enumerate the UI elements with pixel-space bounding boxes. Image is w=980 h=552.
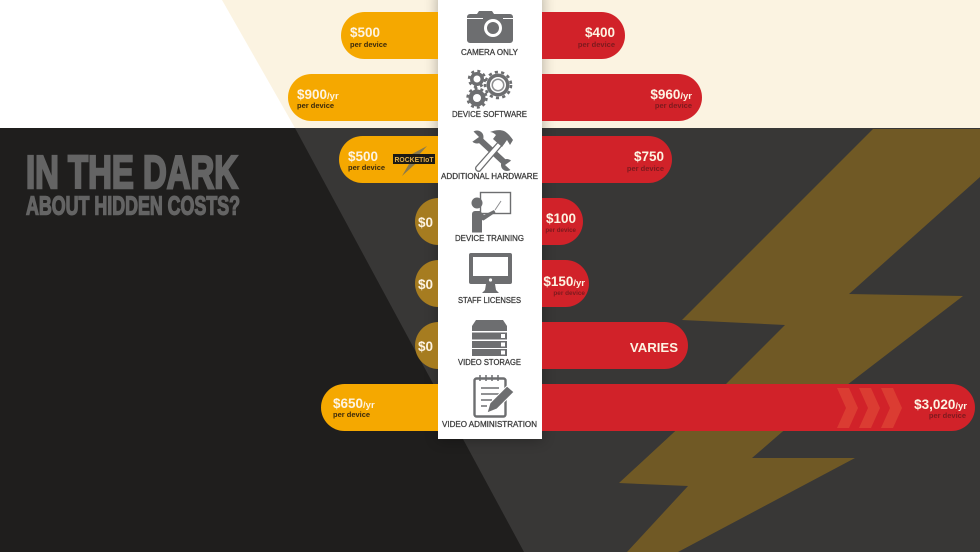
amount: $0 storage: $0 [418, 339, 433, 354]
note: $960 per device: per device [655, 101, 692, 110]
title line 1: IN THE DARK [26, 146, 238, 198]
title line 2: ABOUT HIDDEN COSTS? [26, 192, 240, 220]
left amounts [297, 25, 433, 419]
amount: $900/yr: per device [297, 101, 334, 110]
background: top band cream [222, 0, 980, 128]
note: $100 per device: per device [545, 227, 577, 234]
label: camera only: CAMERA ONLY [461, 47, 518, 57]
panel background [438, 0, 542, 439]
bar: device software, right [500, 74, 702, 121]
icon: notepad and pencil [474, 375, 514, 416]
logo text: ROCKETIoT [394, 155, 434, 164]
amount: $900/yr: /yr [327, 91, 339, 102]
bar: camera only, left [341, 12, 481, 59]
background: top band left white [0, 0, 980, 128]
note: $750 per device: per device [627, 164, 664, 173]
amount: $3,020/yr: $3,020/yr [914, 397, 967, 412]
amount: varies: VARIES [630, 340, 678, 355]
logo: RocketIoT [393, 146, 435, 176]
amount: $650/yr: /yr [363, 400, 375, 411]
amount: $100: $100 [546, 211, 576, 226]
note: $400 per device: per device [578, 40, 615, 49]
panel shadow [438, 0, 542, 440]
right amounts [543, 25, 967, 420]
icon: server storage [472, 320, 507, 356]
note: $3,020 per device: per device [929, 411, 966, 420]
amount: $150/yr: $150/yr [543, 274, 585, 289]
amount: $750: $750 [634, 149, 664, 164]
logo plate [393, 154, 435, 164]
amount: $960/yr: $960/yr [650, 87, 692, 102]
icon: trainer at board [472, 192, 510, 232]
bar: additional hardware, right [500, 136, 672, 183]
background: dark left area [0, 128, 980, 552]
bar: device training, right [500, 198, 583, 245]
label: video administration: VIDEO ADMINISTRATION [442, 419, 537, 429]
icon: wrench and hammer [467, 127, 517, 175]
bar: staff licenses, left [415, 260, 485, 307]
amount: $650/yr: $650 [333, 396, 363, 411]
title [26, 146, 240, 220]
icon: camera [467, 11, 513, 43]
icon: background lightning bolt [619, 129, 980, 552]
right bars: competitor costs [500, 12, 975, 431]
label: device training: DEVICE TRAINING [455, 233, 524, 243]
icon: monitor [469, 253, 512, 293]
bar: video administration, right [500, 384, 975, 431]
bar: camera only, right [500, 12, 625, 59]
amount: $400: $400 [585, 25, 615, 40]
amount: $0 licenses: $0 [418, 277, 433, 292]
amount: $500 hardware: per device [348, 163, 385, 172]
label: staff licenses: STAFF LICENSES [458, 295, 521, 305]
amount: $500 hardware: $500 [348, 149, 378, 164]
bar: video administration, left [321, 384, 481, 431]
label: video storage: VIDEO STORAGE [458, 357, 521, 367]
bar: video storage, left [415, 322, 485, 369]
panel: cost categories [438, 0, 542, 439]
amount: $0 training: $0 [418, 215, 433, 230]
label: additional hardware: ADDITIONAL HARDWARE [441, 171, 538, 181]
chevron arrows [837, 388, 902, 428]
icon: gears [468, 71, 511, 108]
note: $150 per device: per device [553, 290, 585, 297]
background: dark right area [295, 128, 980, 552]
amount: $500: per device [350, 40, 387, 49]
bar: device software, left [288, 74, 478, 121]
amount: $900/yr: $900 [297, 87, 327, 102]
label: device software: DEVICE SOFTWARE [452, 109, 527, 119]
amount: $500: $500 [350, 25, 380, 40]
amount: $650/yr: per device [333, 410, 370, 419]
bar: device training, left [415, 198, 485, 245]
bar: video storage, right [500, 322, 688, 369]
bar: staff licenses, right [500, 260, 589, 307]
logo bolt [402, 146, 427, 176]
left bars: rocket iot costs [288, 12, 485, 431]
bar: additional hardware, left [339, 136, 479, 183]
